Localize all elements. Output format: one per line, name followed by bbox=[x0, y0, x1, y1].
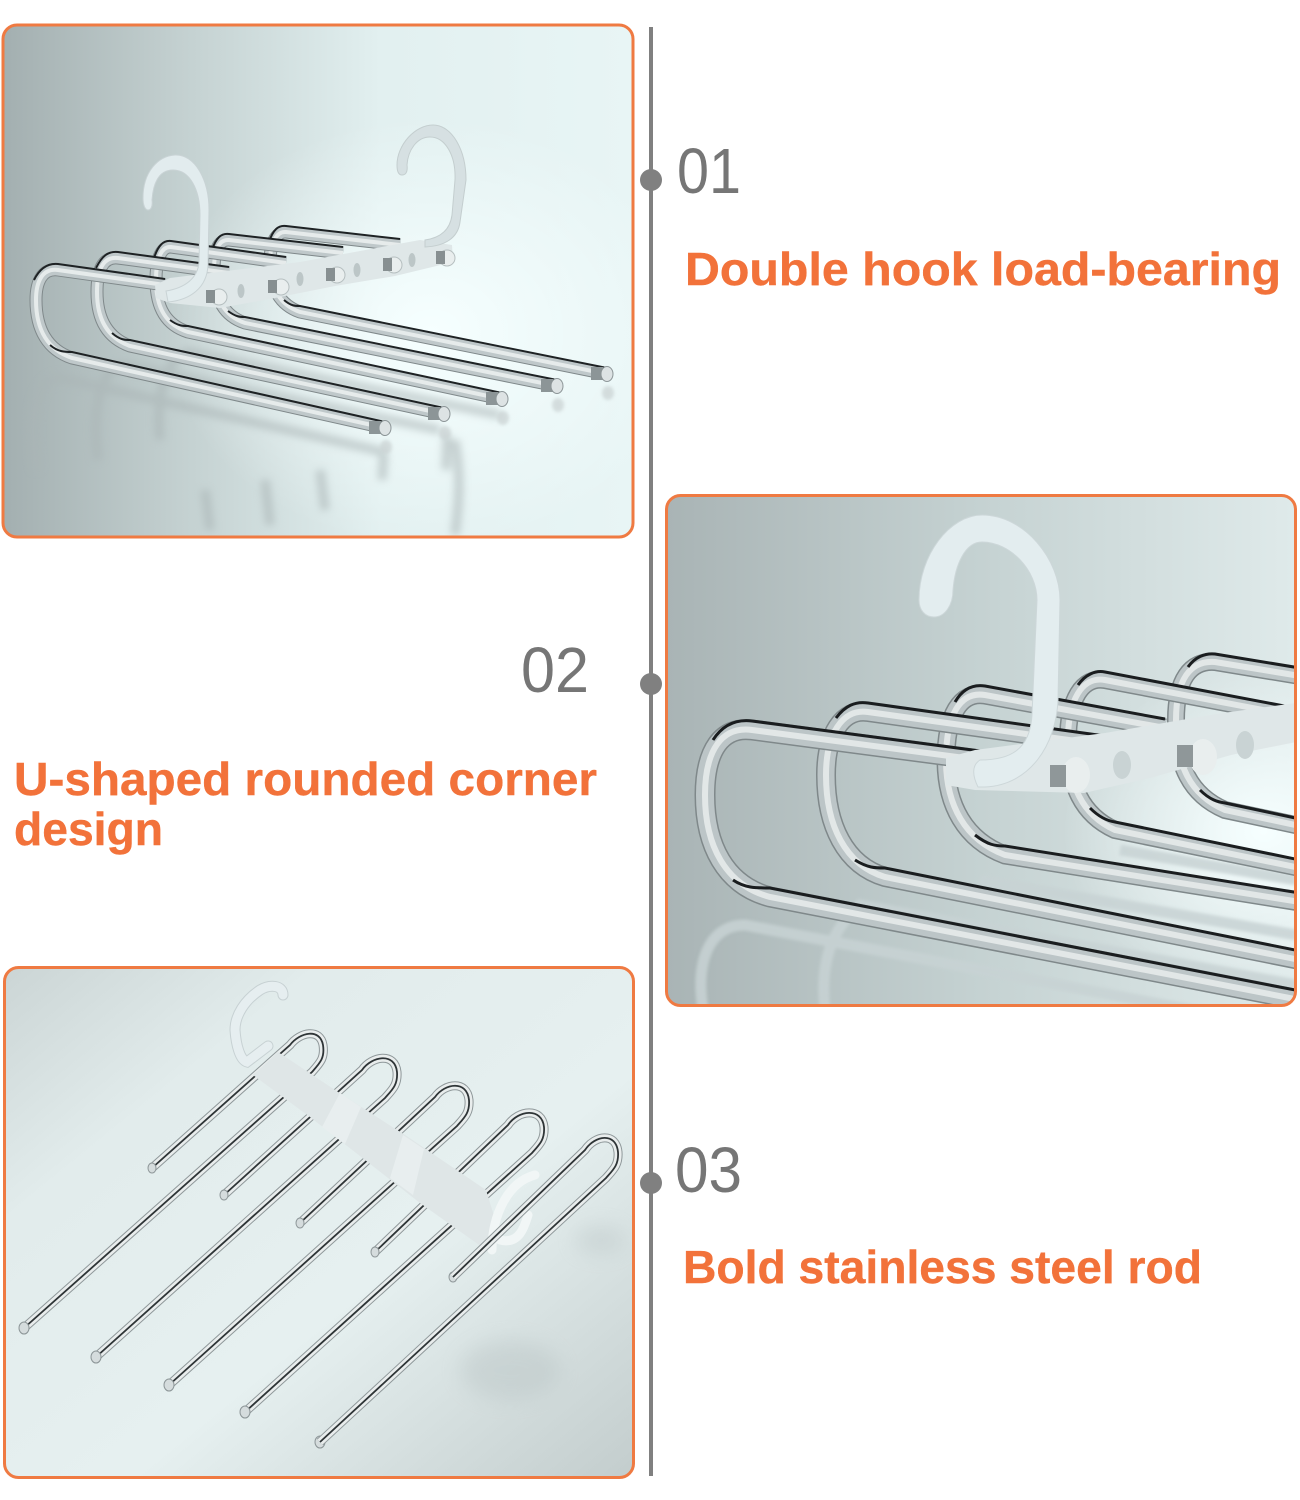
rods bbox=[705, 654, 1300, 1000]
number 01: 01 bbox=[677, 135, 741, 207]
panel: stainless rod photo bbox=[4, 968, 634, 1478]
front rod bbox=[320, 1138, 618, 1442]
timeline line bbox=[649, 27, 653, 1476]
icon: top hook bbox=[235, 986, 283, 1062]
plastic band with pegs bbox=[946, 703, 1296, 793]
number 02: 02 bbox=[521, 634, 589, 706]
rods bbox=[24, 1034, 544, 1412]
panel: U-shaped close-up photo bbox=[666, 496, 1300, 1030]
heading: U-shaped design: design bbox=[14, 803, 163, 855]
heading: double hook: Double hook load-bearing bbox=[685, 243, 1281, 295]
rod end caps bbox=[369, 366, 614, 454]
icon: rear hook bbox=[492, 1175, 535, 1250]
rod tips bbox=[19, 1163, 457, 1448]
timeline dot 02 bbox=[640, 673, 662, 695]
heading: bold rod: Bold stainless steel rod bbox=[683, 1241, 1202, 1293]
icon: front hook bbox=[143, 155, 209, 302]
panel: double hook photo bbox=[3, 25, 633, 537]
heading: U-shaped design: U-shaped rounded corner bbox=[14, 753, 597, 805]
icon: close-up hook bbox=[919, 515, 1060, 787]
heading: U-shaped design bbox=[14, 753, 597, 855]
reflection of rods bbox=[122, 347, 501, 536]
timeline dot 03 bbox=[640, 1172, 662, 1194]
icon: rear hook bbox=[397, 125, 466, 247]
timeline dot 01 bbox=[640, 169, 662, 191]
soft shadows bbox=[466, 1230, 614, 1394]
plastic band bbox=[254, 1052, 491, 1232]
reflection of rods bbox=[694, 845, 1294, 1004]
rods bbox=[34, 226, 607, 428]
number 03: 03 bbox=[675, 1134, 742, 1206]
plastic band with pegs bbox=[155, 240, 455, 308]
